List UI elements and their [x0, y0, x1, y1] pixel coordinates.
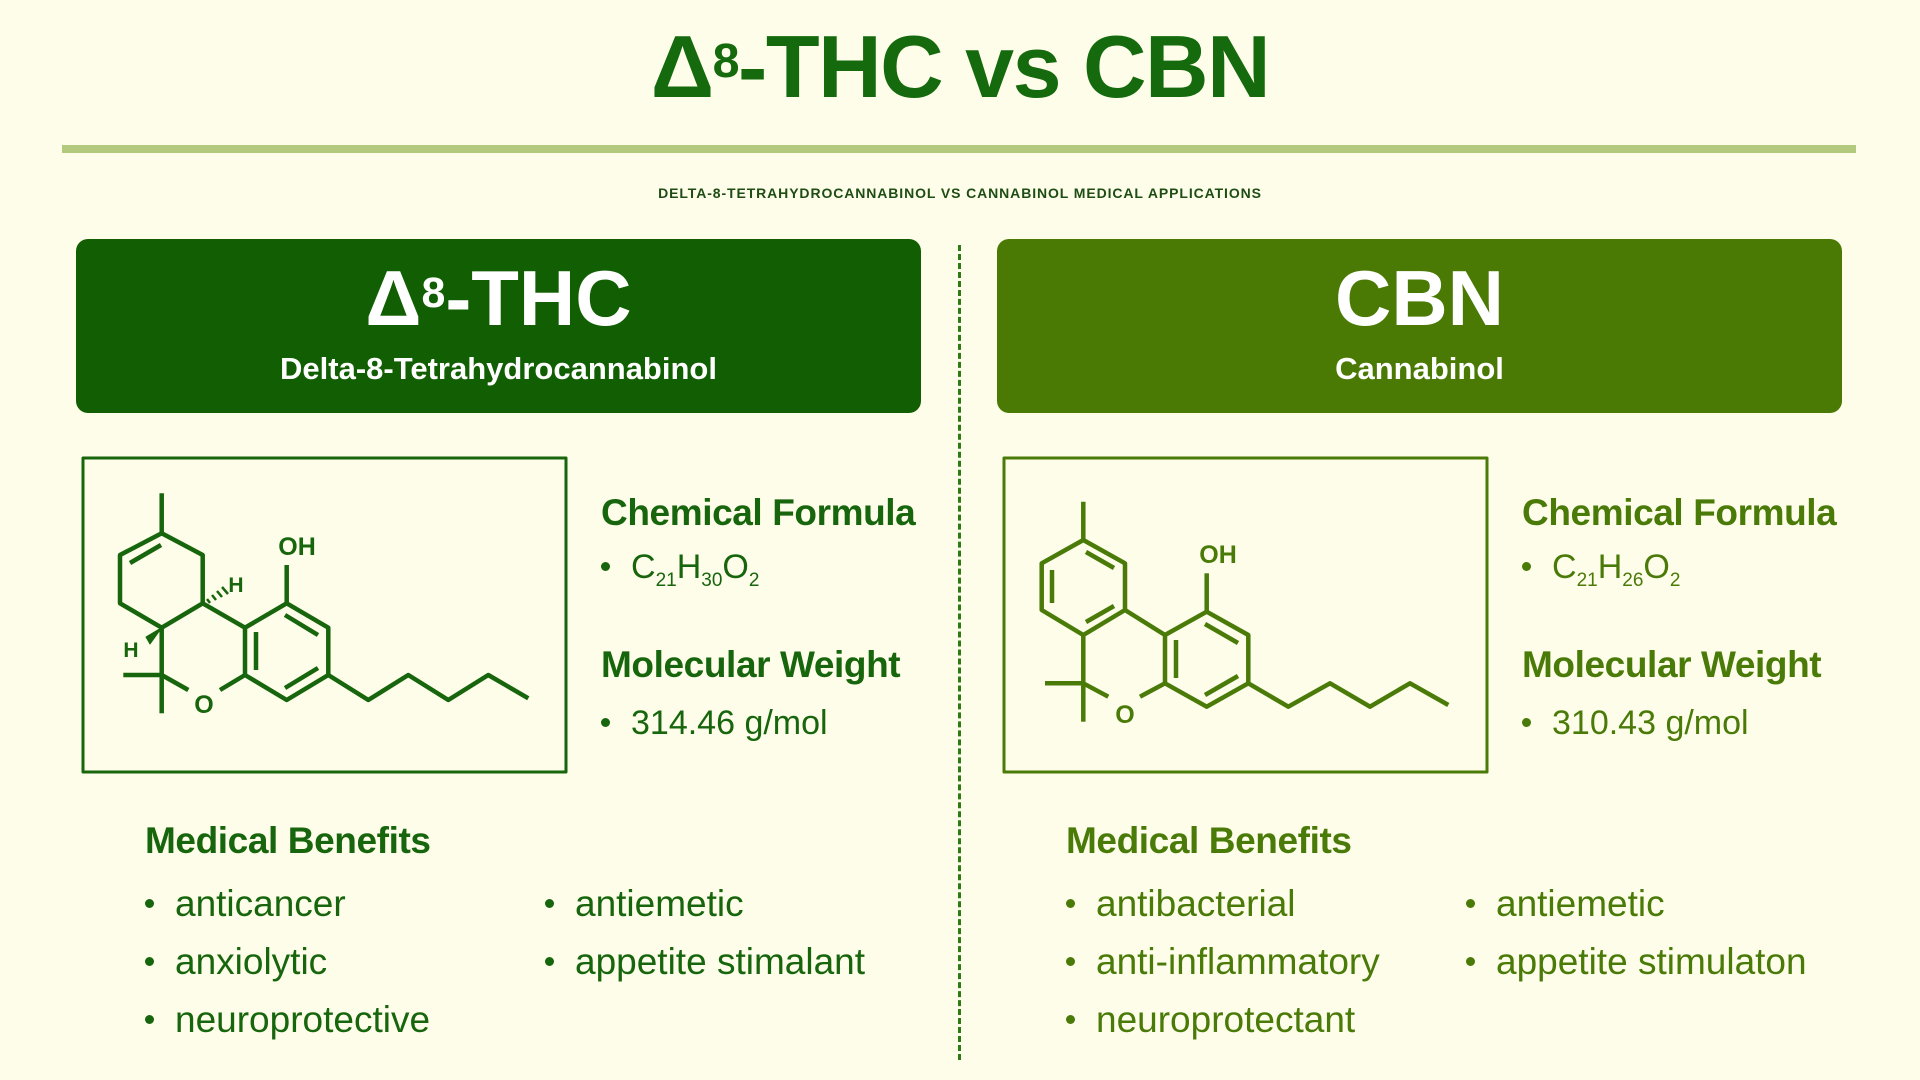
text block: THC medical benefits: anticancer — [175, 883, 346, 924]
text block: THC medical benefits: anxiolytic — [175, 941, 327, 982]
text block: THC medical benefits: appetite stimalant — [575, 941, 865, 982]
text block: CBN medical benefits: antibacterial — [1096, 883, 1296, 924]
panel: delta-8-THC header: Delta-8-Tetrahydrocannabinol — [280, 351, 717, 386]
text block: CBN medical benefits — [1066, 820, 1807, 1040]
text block: CBN medical benefits: neuroprotectant — [1096, 999, 1355, 1040]
text block: CBN medical benefits: antiemetic — [1496, 883, 1665, 924]
text block: THC chemical info — [601, 492, 916, 742]
text block: THC chemical info: Molecular Weight — [601, 644, 900, 685]
text block: THC medical benefits — [145, 820, 865, 1040]
panel: CBN header: Cannabinol — [1335, 351, 1504, 386]
text block: CBN medical benefits: Medical Benefits — [1066, 820, 1352, 861]
chart: molecule structures: OH — [1199, 541, 1237, 569]
panel: delta-8-THC header: Δ8-THC — [365, 254, 632, 342]
header divider — [62, 145, 1856, 153]
text block: THC chemical info: C21H30O2 — [631, 548, 759, 591]
text block: CBN chemical info: Chemical Formula — [1522, 492, 1836, 533]
text block: CBN chemical info — [1522, 492, 1837, 742]
icon: THC molecule — [83, 458, 566, 772]
chart: molecule structures: H — [123, 639, 139, 662]
center dashed divider — [958, 245, 961, 1060]
text block: THC chemical info: 314.46 g/mol — [631, 704, 828, 742]
text block: CBN chemical info: 310.43 g/mol — [1552, 704, 1749, 742]
text block: THC medical benefits: Medical Benefits — [145, 820, 431, 861]
chart: molecule structures: O — [194, 691, 214, 719]
panel: CBN header: CBN — [1335, 254, 1504, 342]
subtitle: DELTA-8-TETRAHYDROCANNABINOL VS CANNABINOL MEDICAL APPLICATIONS — [658, 185, 1262, 201]
chart: molecule structures: H — [228, 574, 244, 597]
text block: CBN chemical info: C21H26O2 — [1552, 548, 1680, 591]
text block: THC medical benefits: antiemetic — [575, 883, 744, 924]
text block: CBN medical benefits: appetite stimulaton — [1496, 941, 1807, 982]
title: Δ8-THC vs CBN — [651, 17, 1269, 116]
chart: molecule structures: O — [1115, 701, 1135, 729]
text block: THC chemical info: Chemical Formula — [601, 492, 915, 533]
panel: delta-8-THC header — [76, 239, 921, 413]
text block: CBN chemical info: Molecular Weight — [1522, 644, 1821, 685]
text block: CBN medical benefits: anti-inflammatory — [1096, 941, 1380, 982]
panel: CBN header — [997, 239, 1842, 413]
chart: molecule structures: OH — [278, 533, 316, 561]
text block: THC medical benefits: neuroprotective — [175, 999, 430, 1040]
icon: CBN molecule — [1004, 458, 1487, 772]
